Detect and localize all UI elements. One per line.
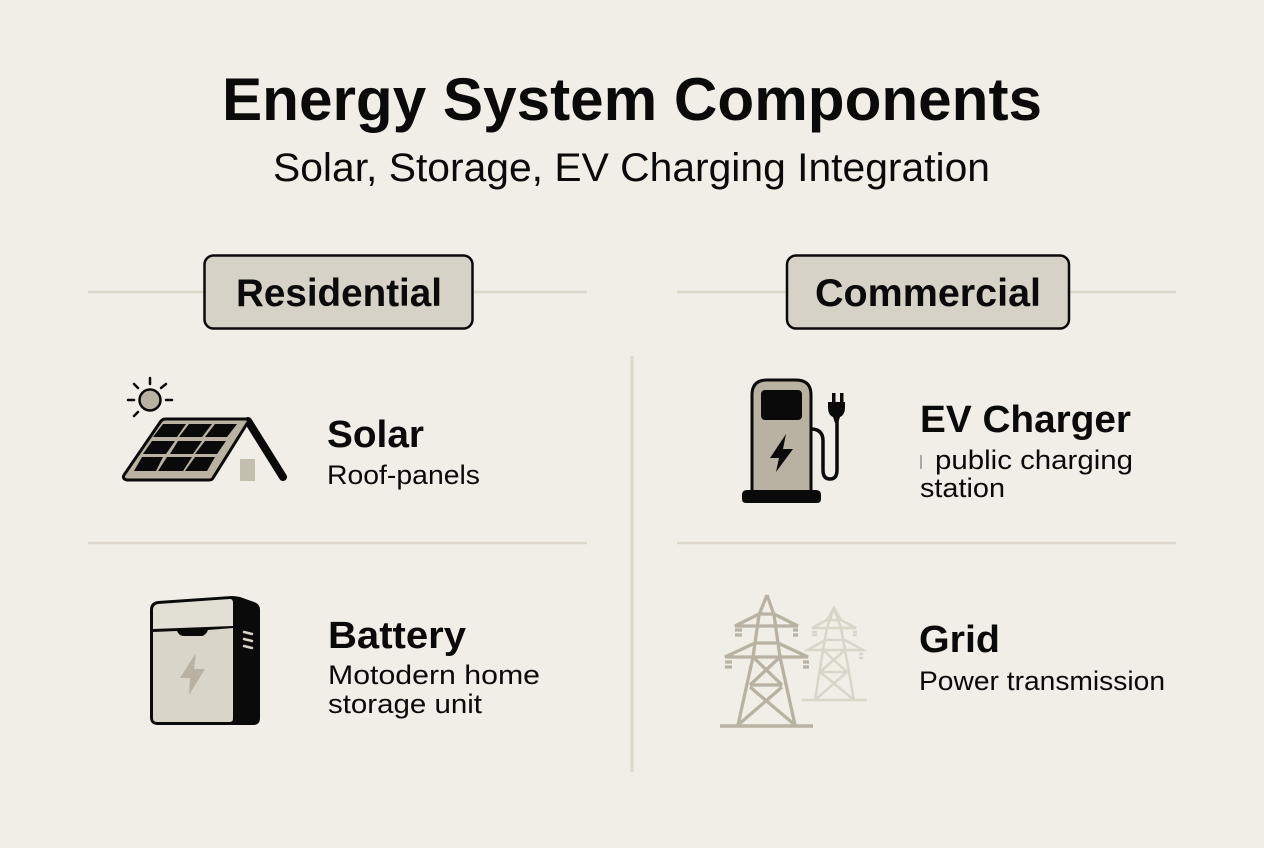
icon: rear tower [802, 608, 867, 700]
heading: Residential [204, 256, 472, 328]
icon: solar panel on roof [123, 378, 283, 481]
description: EV charger: ı [920, 445, 922, 475]
icon: home battery [150, 596, 260, 725]
heading: Commercial [787, 256, 1069, 328]
title: Energy System Components [222, 66, 1042, 133]
label: EV Charger: EV Charger [920, 399, 1131, 441]
description: Roof-panels: Roof-panels [327, 460, 480, 490]
icon: EV charging station [742, 380, 845, 503]
label: Grid: Grid [919, 619, 1000, 661]
heading: Residential: Residential [236, 272, 442, 315]
description: battery storage: storage unit [328, 689, 483, 719]
description: battery storage: Motodern home [328, 660, 540, 690]
label: Solar: Solar [327, 414, 424, 456]
description: Power transmission: Power transmission [919, 666, 1165, 696]
description: EV charger: public charging [935, 445, 1133, 475]
subtitle: Solar, Storage, EV Charging Integration [273, 146, 990, 190]
panel: battery [150, 596, 540, 725]
heading: Commercial: Commercial [815, 272, 1041, 315]
panel: solar [123, 378, 480, 490]
panel: EV charger [742, 380, 1133, 503]
icon: transmission towers [720, 595, 867, 726]
panel: grid [720, 595, 1165, 726]
label: Battery: Battery [328, 615, 466, 657]
icon: front tower [720, 595, 813, 726]
description: EV charger: station [920, 473, 1005, 503]
